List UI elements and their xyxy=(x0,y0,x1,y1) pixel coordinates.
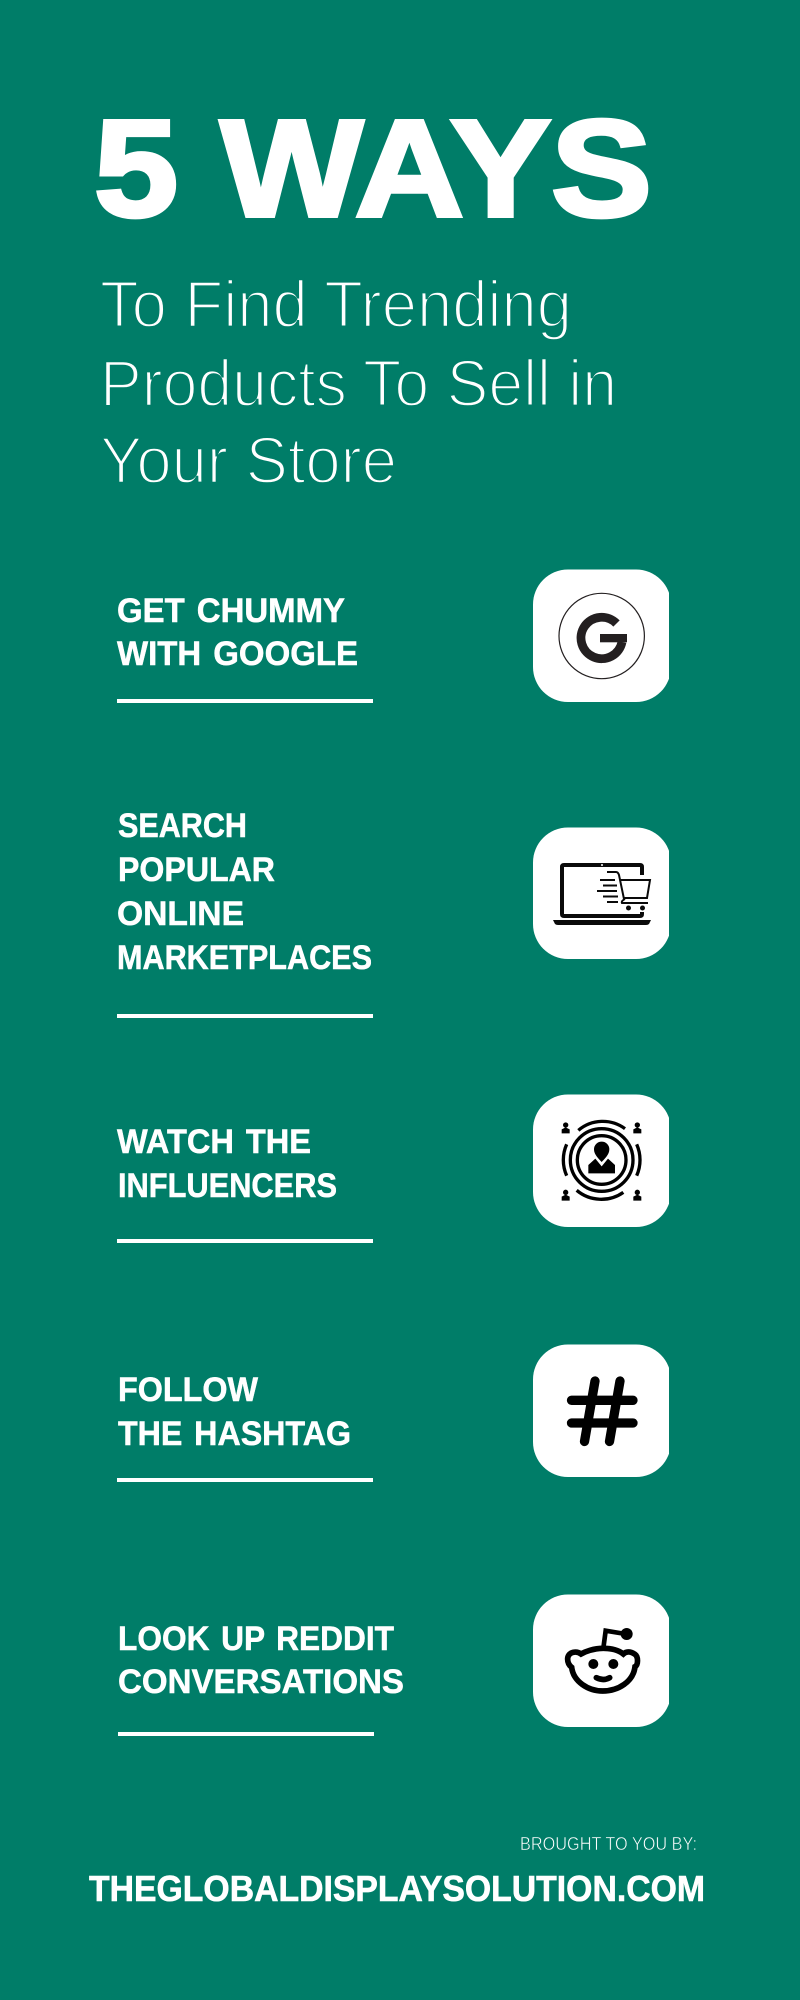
subtitle: To Find Trending xyxy=(100,267,572,341)
heading: watch the influencers xyxy=(117,1123,337,1205)
subtitle: Your Store xyxy=(100,423,397,497)
heading: look up reddit conversations: LOOK UP REDDIT xyxy=(118,1620,394,1658)
heading: search popular online marketplaces xyxy=(117,807,372,977)
heading: watch the influencers: INFLUENCERS xyxy=(118,1167,337,1205)
footer: website url: THEGLOBALDISPLAYSOLUTION.COM xyxy=(89,1868,705,1909)
panel: step 1 xyxy=(117,570,671,703)
heading: look up reddit conversations xyxy=(118,1620,404,1701)
heading: search popular online marketplaces: SEARCH xyxy=(118,807,247,845)
heading: search popular online marketplaces: ONLINE xyxy=(117,895,244,933)
footer: brought to you by: BROUGHT TO YOU BY: xyxy=(520,1834,697,1854)
heading: get chummy with google: GET CHUMMY xyxy=(117,592,345,630)
panel: step 4 xyxy=(117,1344,671,1482)
heading: follow the hashtag: FOLLOW xyxy=(118,1371,259,1409)
subtitle xyxy=(100,267,617,497)
panel: step 5 xyxy=(118,1594,671,1736)
title: 5 WAYS xyxy=(94,92,652,246)
icon: google xyxy=(533,570,671,702)
heading: search popular online marketplaces: MARKETPLACES xyxy=(117,939,372,977)
panel: step 3 xyxy=(117,1094,671,1243)
icon: laptop with shopping cart xyxy=(533,828,671,959)
heading: search popular online marketplaces: POPULAR xyxy=(118,851,275,889)
icon: hashtag xyxy=(533,1344,671,1477)
heading: look up reddit conversations: CONVERSATIONS xyxy=(118,1663,404,1701)
icon: reddit alien xyxy=(533,1594,671,1727)
subtitle: Products To Sell in xyxy=(100,346,617,420)
heading: get chummy with google: WITH GOOGLE xyxy=(117,635,358,673)
panel: step 2 xyxy=(117,807,671,1018)
icon: influencer network xyxy=(533,1094,671,1227)
heading: watch the influencers: WATCH THE xyxy=(117,1123,311,1161)
heading: follow the hashtag xyxy=(118,1371,351,1453)
heading: follow the hashtag: THE HASHTAG xyxy=(118,1415,351,1453)
heading: get chummy with google xyxy=(117,592,358,673)
